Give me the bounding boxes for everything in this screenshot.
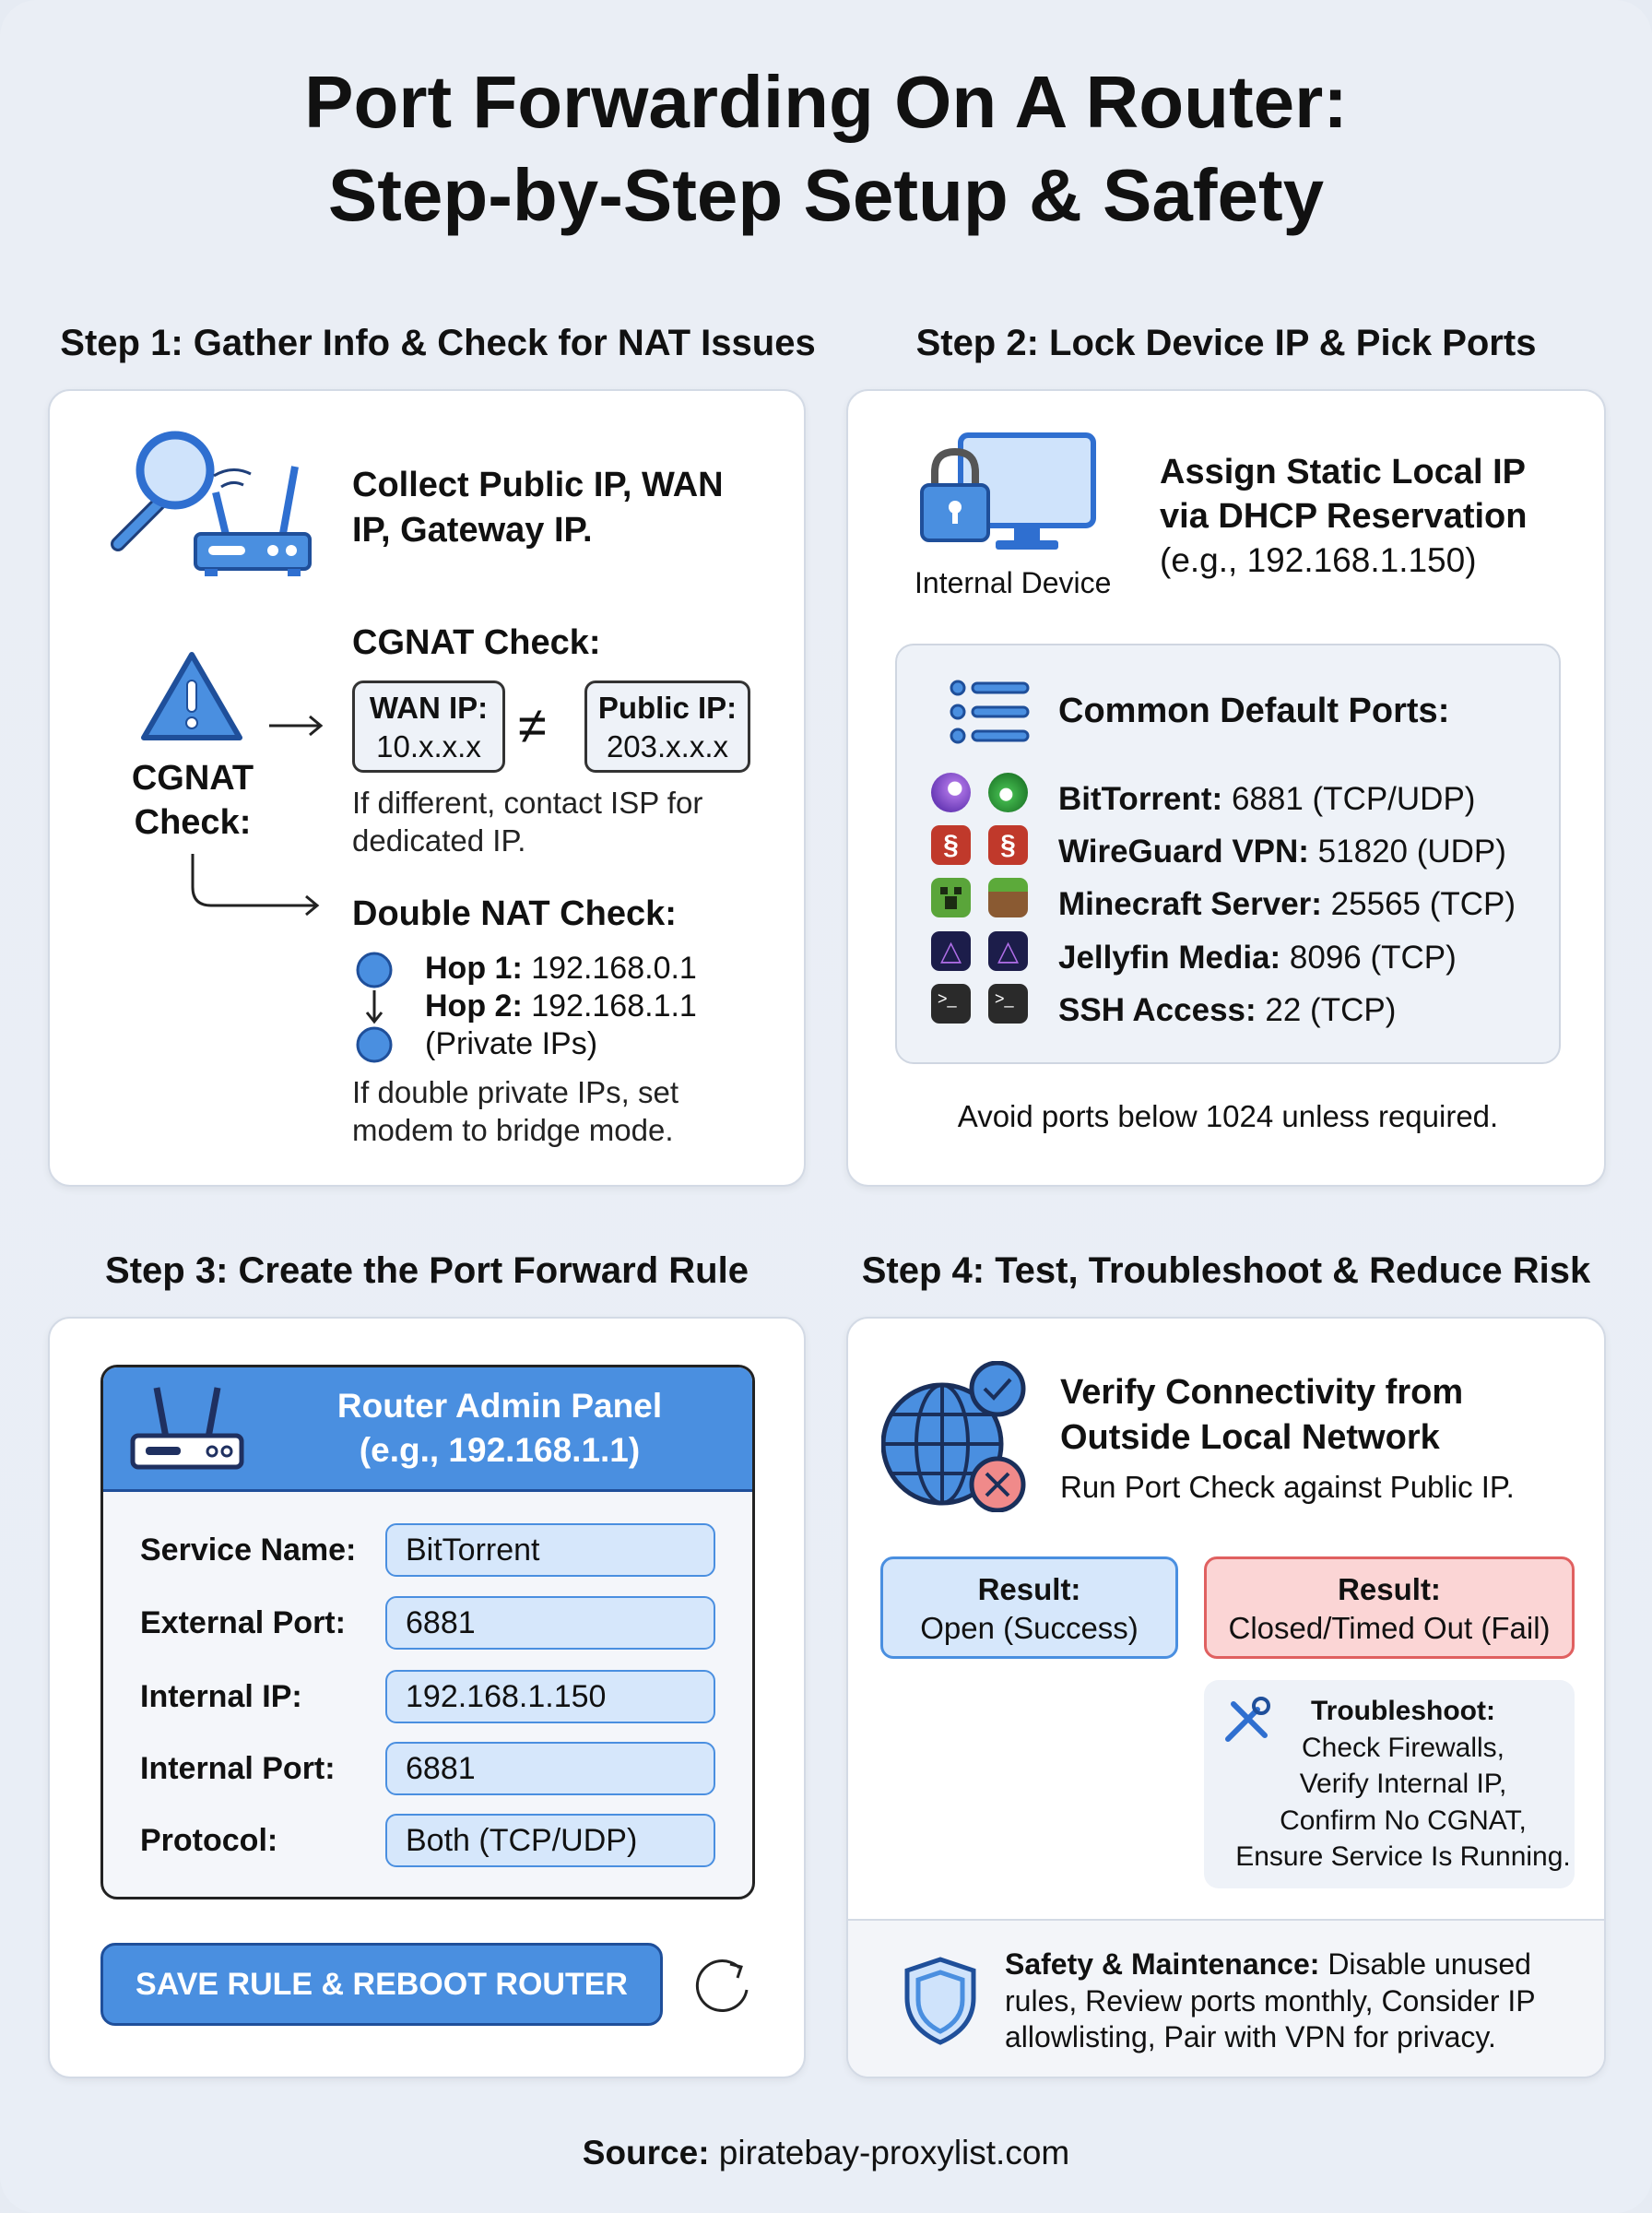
- form fields: BitTorrent: [406, 1533, 540, 1568]
- text: hops: (Private IPs): [425, 1026, 597, 1061]
- icon: refresh: [695, 1959, 749, 2012]
- box: result fail: [1204, 1556, 1575, 1659]
- panel: step 1: [48, 389, 806, 1187]
- text: admin title: (e.g., 192.168.1.1): [360, 1431, 640, 1469]
- box: WAN IP: 10.x.x.x: [376, 729, 481, 763]
- icons: port apps: §: [943, 830, 959, 860]
- form fields: 6881: [406, 1751, 476, 1786]
- text: CGNAT check left: [132, 759, 254, 842]
- source: Source: piratebay-proxylist.com: [583, 2134, 1069, 2172]
- text: internal device: Internal Device: [914, 566, 1111, 599]
- text: bridge mode: modem to bridge mode.: [352, 1113, 674, 1147]
- icon: lock and monitor: [920, 432, 1096, 550]
- arrow: to CGNAT: [269, 716, 323, 736]
- text: CGNAT check left: CGNAT: [132, 759, 254, 798]
- box: Public IP: Public IP:: [598, 691, 737, 725]
- icons: port apps: [931, 773, 1028, 1024]
- list: port rows: WireGuard VPN: 51820 (UDP): [1058, 834, 1506, 870]
- text: verify: Verify Connectivity from: [1060, 1373, 1463, 1412]
- text: safety: allowlisting, Pair with VPN for privacy.: [1005, 2020, 1496, 2053]
- title: Step-by-Step Setup & Safety: [328, 154, 1324, 236]
- icon: tools: [1225, 1697, 1270, 1742]
- icon: shield: [905, 1957, 975, 2045]
- icon: hops: [356, 952, 393, 1062]
- panel: step 4: [846, 1317, 1606, 2078]
- text: verify: [1060, 1373, 1463, 1457]
- text: contact ISP: dedicated IP.: [352, 823, 525, 858]
- text: avoid ports: Avoid ports below 1024 unless required.: [958, 1099, 1498, 1133]
- text: hops: Hop 2: 192.168.1.1: [425, 988, 697, 1024]
- text: assign static IP: (e.g., 192.168.1.150): [1160, 541, 1477, 579]
- text: safety: rules, Review ports monthly, Consider IP: [1005, 1984, 1536, 2018]
- heading: common default ports: Common Default Ports:: [1058, 692, 1449, 730]
- text: hops: [425, 951, 697, 1061]
- icons: port apps: §: [1000, 830, 1016, 860]
- form fields: 192.168.1.150: [406, 1679, 606, 1714]
- text: bridge mode: [352, 1075, 678, 1147]
- form fields: Service Name:: [140, 1533, 356, 1568]
- box: result open: Result:: [978, 1572, 1080, 1606]
- text: assign static IP: [1160, 453, 1527, 579]
- text: admin title: [337, 1387, 662, 1469]
- title: [304, 61, 1348, 236]
- text: CGNAT check left: Check:: [135, 803, 251, 842]
- icon: router: [131, 1387, 243, 1470]
- admin header: [103, 1367, 758, 1492]
- form fields: Protocol:: [140, 1823, 277, 1858]
- panel: step 2: [846, 389, 1606, 1187]
- icons: port apps: △: [940, 936, 962, 966]
- heading: step 2: Step 2: Lock Device IP & Pick Ports: [916, 323, 1536, 363]
- list: port rows: SSH Access: 22 (TCP): [1058, 992, 1396, 1028]
- icon: list: [950, 680, 1029, 743]
- box: WAN IP: WAN IP:: [370, 691, 488, 725]
- form fields: Internal Port:: [140, 1751, 336, 1786]
- box: troubleshoot: [1204, 1680, 1575, 1888]
- icons: port apps: >_: [938, 989, 957, 1008]
- box: result fail: Result:: [1338, 1572, 1441, 1606]
- box: result open: [880, 1556, 1178, 1659]
- form fields: Internal IP:: [140, 1679, 302, 1714]
- form fields: [140, 1523, 715, 1867]
- heading: step 4: Step 4: Test, Troubleshoot & Reduce Risk: [862, 1250, 1590, 1291]
- symbol: not equal: ≠: [518, 696, 547, 754]
- text: admin title: Router Admin Panel: [337, 1387, 662, 1425]
- box: common default ports: [895, 644, 1561, 1064]
- icon: globe with check and x: [881, 1361, 1025, 1512]
- box: Public IP: [584, 680, 750, 773]
- text: collect info: Collect Public IP, WAN: [352, 466, 724, 504]
- text: assign static IP: Assign Static Local IP: [1160, 453, 1526, 491]
- text: contact ISP: If different, contact ISP for: [352, 786, 702, 820]
- icons: port apps: △: [997, 936, 1019, 966]
- title: Port Forwarding On A Router:: [304, 61, 1348, 143]
- text: run port check: Run Port Check against Public IP.: [1060, 1470, 1515, 1504]
- heading: step 1: Step 1: Gather Info & Check for NAT Issues: [60, 323, 816, 363]
- form fields: 6881: [406, 1605, 476, 1640]
- text: troubleshoot list: Troubleshoot:: [1311, 1696, 1495, 1726]
- text: contact ISP: [352, 786, 702, 858]
- form fields: Both (TCP/UDP): [406, 1823, 637, 1858]
- text: bridge mode: If double private IPs, set: [352, 1075, 678, 1109]
- box: result open: Open (Success): [920, 1611, 1139, 1645]
- arrow: elbow to double NAT: [192, 854, 319, 917]
- icons: port apps: >_: [995, 989, 1014, 1008]
- box: WAN IP: [352, 680, 505, 773]
- text: hops: Hop 1: 192.168.0.1: [425, 951, 697, 986]
- list: port rows: BitTorrent: 6881 (TCP/UDP): [1058, 781, 1475, 817]
- text: assign static IP: via DHCP Reservation: [1160, 497, 1527, 536]
- box: result fail: Closed/Timed Out (Fail): [1228, 1611, 1551, 1645]
- section: safety: [848, 1919, 1608, 2085]
- heading: step 3: Step 3: Create the Port Forward Rule: [105, 1250, 749, 1291]
- text: troubleshoot list: Confirm No CGNAT,: [1280, 1805, 1527, 1835]
- text: troubleshoot list: [1235, 1696, 1571, 1872]
- button: save rule: SAVE RULE & REBOOT ROUTER: [136, 1967, 628, 2002]
- text: safety: Safety & Maintenance: Disable unused: [1005, 1947, 1531, 1981]
- box: Public IP: 203.x.x.x: [607, 729, 728, 763]
- list: port rows: Minecraft Server: 25565 (TCP): [1058, 886, 1516, 922]
- text: collect info: IP, Gateway IP.: [352, 511, 593, 550]
- admin panel: [100, 1365, 755, 1899]
- text: verify: Outside Local Network: [1060, 1418, 1440, 1457]
- list: port rows: Jellyfin Media: 8096 (TCP): [1058, 940, 1457, 976]
- icon: warning: [141, 652, 242, 740]
- text: collect info: [352, 466, 724, 550]
- button: save rule: [100, 1943, 663, 2026]
- heading: double NAT: Double NAT Check:: [352, 894, 677, 933]
- list: port rows: [1058, 781, 1516, 1028]
- heading: CGNAT check: CGNAT Check:: [352, 623, 601, 662]
- text: troubleshoot list: Verify Internal IP,: [1300, 1769, 1506, 1799]
- panel: step 3: [48, 1317, 806, 2078]
- text: troubleshoot list: Ensure Service Is Running.: [1235, 1841, 1571, 1872]
- form fields: External Port:: [140, 1605, 346, 1640]
- text: safety: [1005, 1947, 1536, 2053]
- icon: magnifier router: [111, 432, 312, 576]
- text: troubleshoot list: Check Firewalls,: [1302, 1732, 1504, 1763]
